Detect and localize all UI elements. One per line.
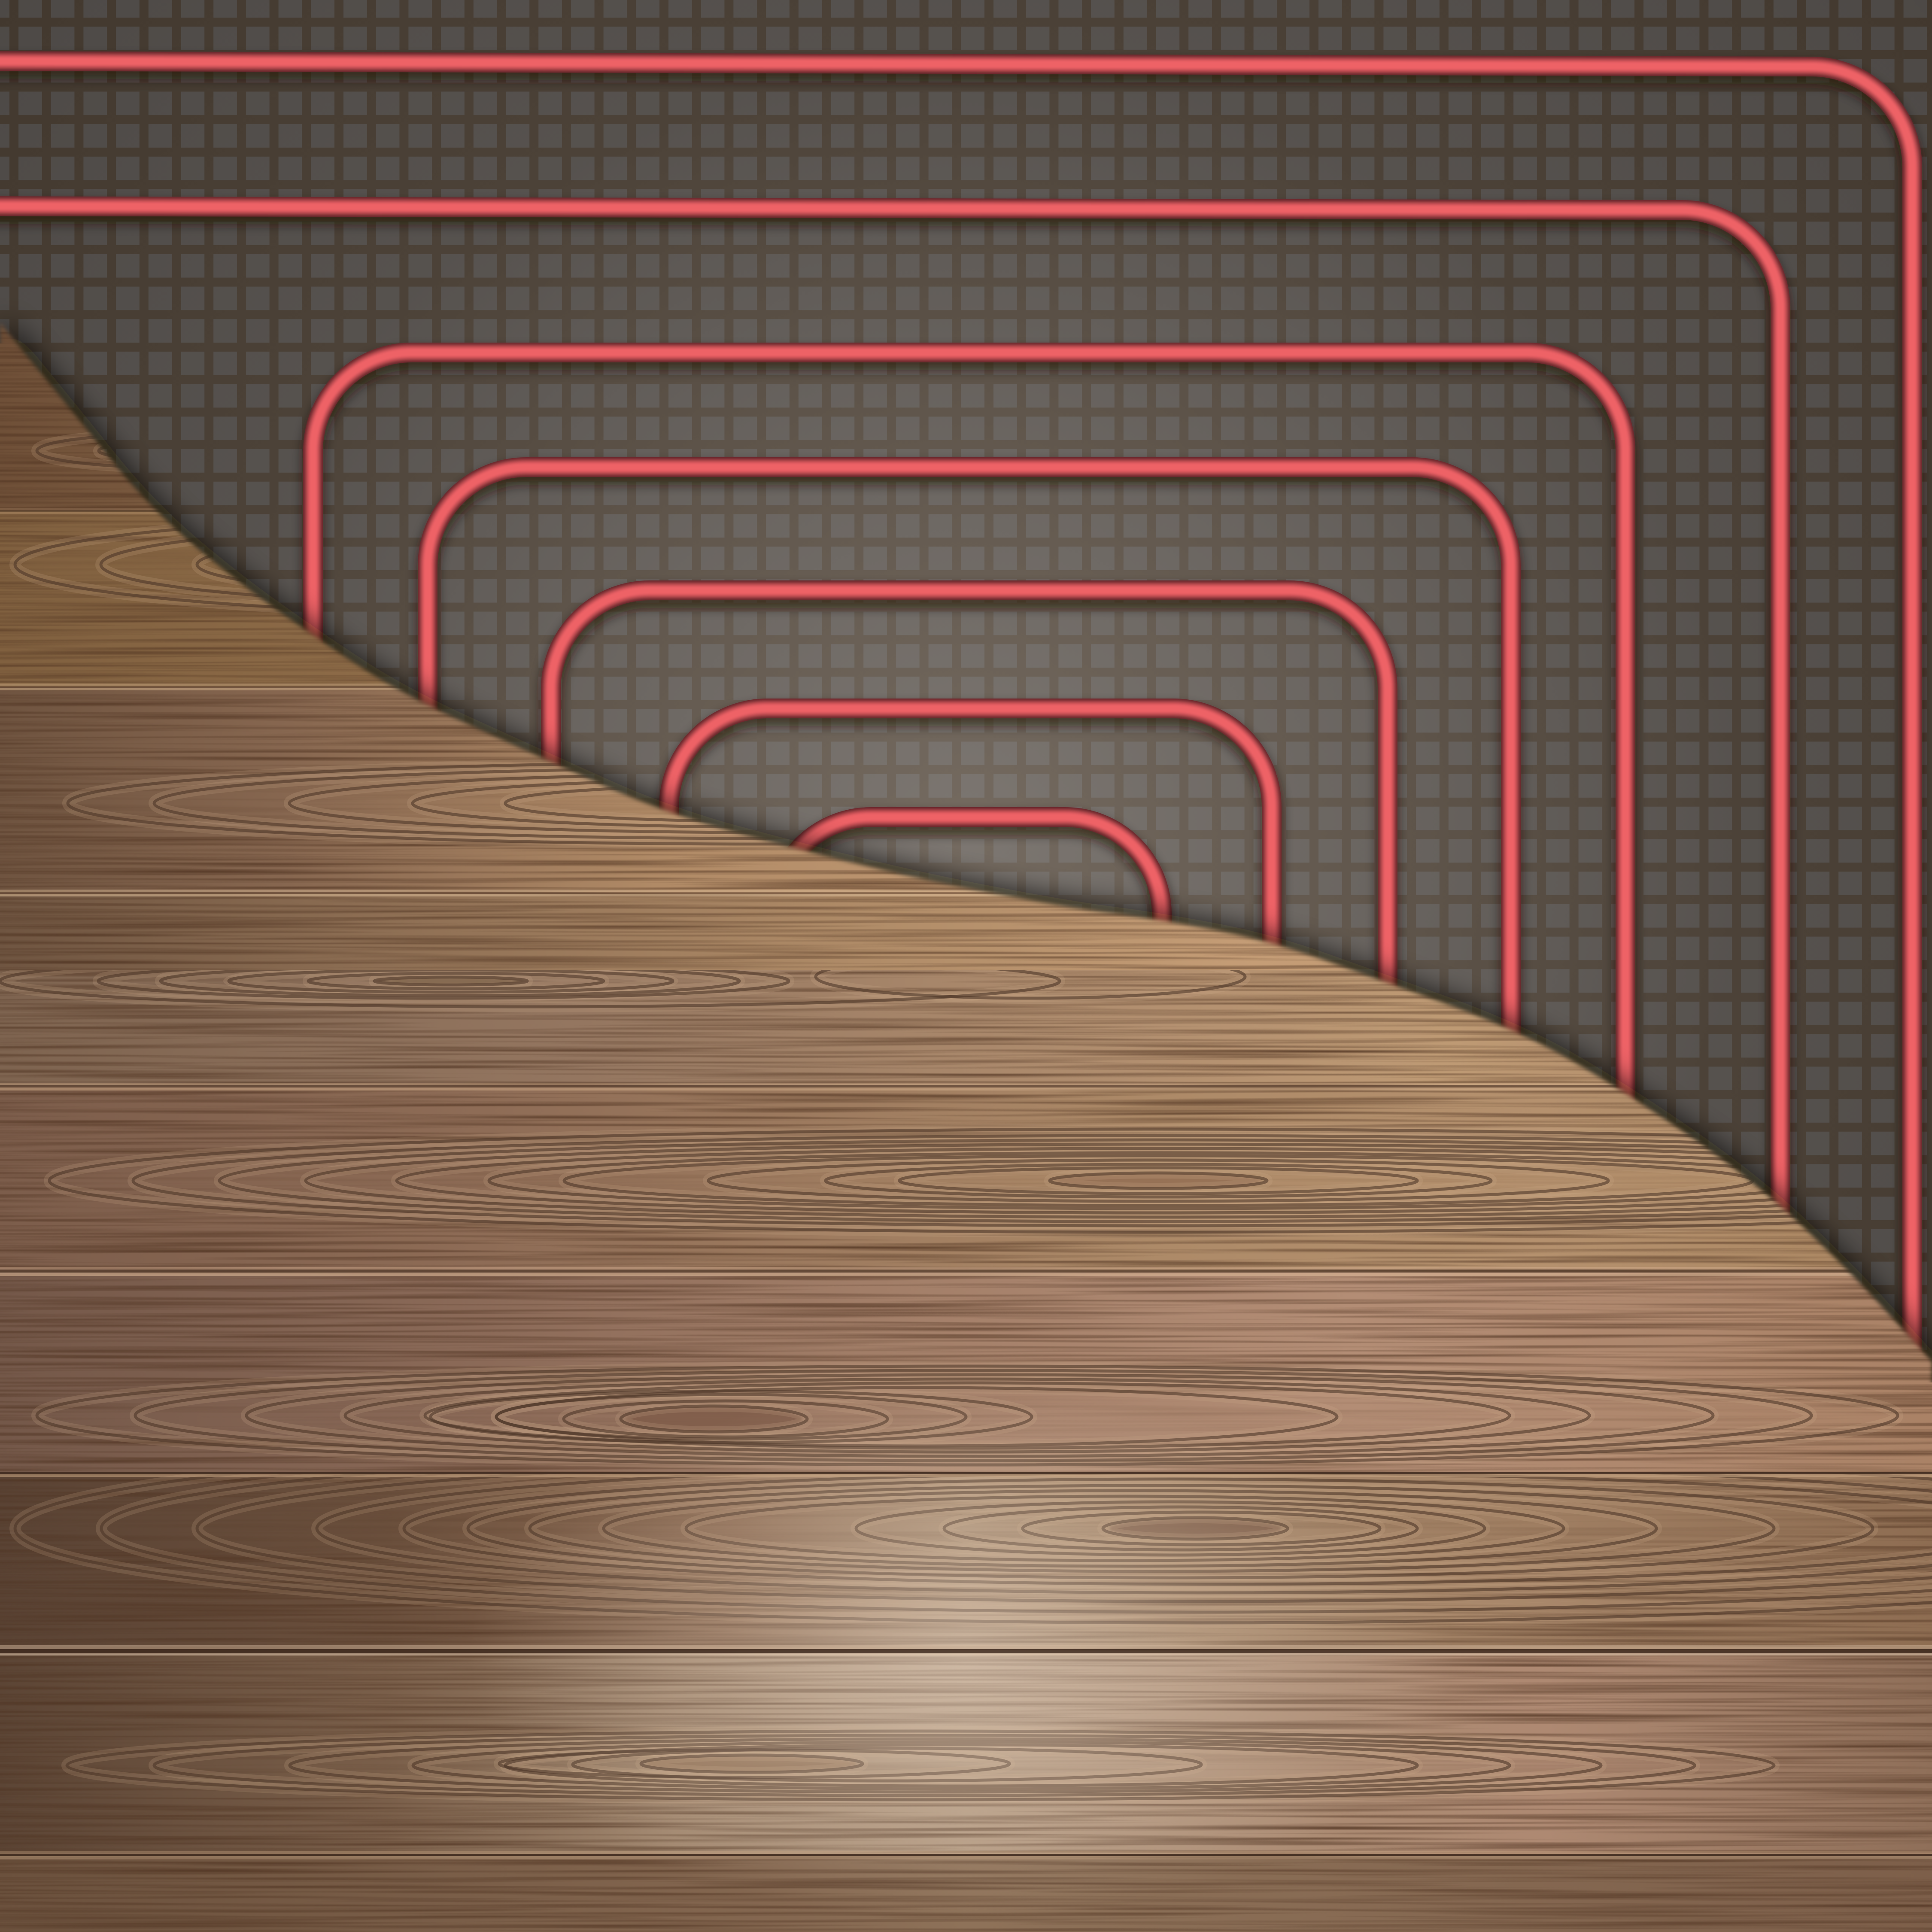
light highlight on the floor bbox=[468, 1387, 1455, 1919]
heating pipe 2 bbox=[0, 206, 1780, 1252]
rings: second plank bbox=[15, 513, 1217, 616]
rings: plank with knot left of centre bbox=[37, 1366, 1898, 1465]
rings: cut-off plank knot bbox=[0, 955, 1245, 1007]
rings: plank with knot right of centre bbox=[49, 1129, 1932, 1232]
rings: lower plank bbox=[67, 1731, 1774, 1800]
rings: top-left plank bbox=[37, 434, 332, 468]
rings: plank with double knot bbox=[15, 1434, 1932, 1623]
heating pipe 7: innermost loop bbox=[774, 817, 1162, 951]
heating pipe 3: loop bbox=[313, 352, 1625, 1123]
heating pipe 4: loop bbox=[428, 467, 1511, 1072]
rings: third plank bbox=[68, 762, 1461, 844]
heating pipe 1: outermost run bbox=[0, 61, 1912, 1402]
heating pipe 5: loop bbox=[551, 590, 1388, 1016]
plank seams bbox=[0, 508, 1932, 1859]
knot centres bbox=[378, 978, 1281, 1771]
heating pipe 6: loop bbox=[669, 708, 1272, 973]
